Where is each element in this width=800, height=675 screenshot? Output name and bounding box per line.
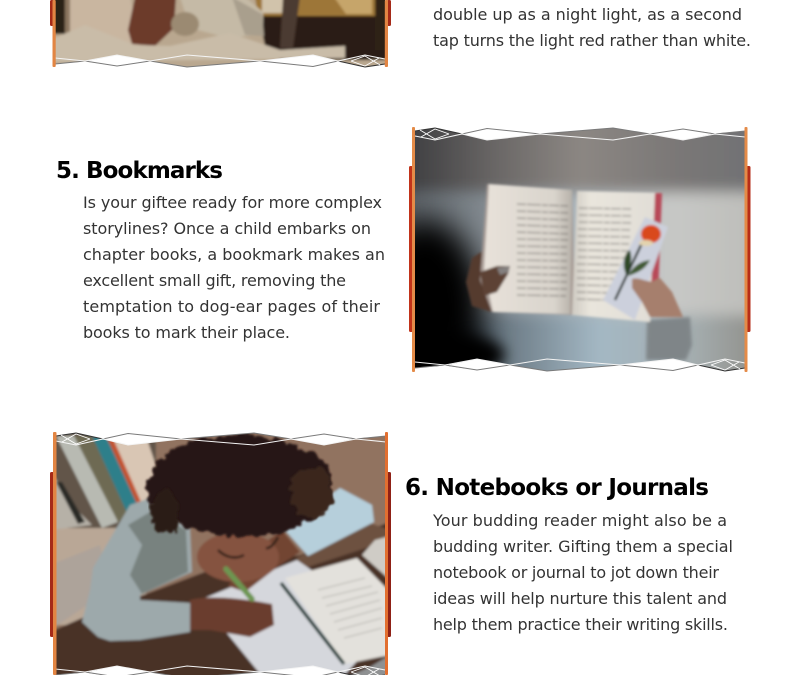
body text: bookmarks: Is your giftee ready for more complex	[83, 193, 382, 212]
body text: notebooks	[432, 511, 733, 634]
body text: bookmarks: storylines? Once a child embarks on	[83, 219, 371, 238]
body text: bookmarks: temptation to dog-ear pages of their	[83, 297, 380, 316]
photo: hands holding open book with rose bookmark	[415, 128, 744, 370]
body text: notebooks: Your budding reader might also be a	[432, 511, 727, 530]
text block: night light description (end): tap turns the light red rather than white.	[433, 31, 751, 50]
body text: notebooks: notebook or journal to jot down their	[433, 563, 719, 582]
side bars: left	[50, 432, 56, 675]
body text: bookmarks: excellent small gift, removing the	[83, 271, 346, 290]
side bars: left	[50, 0, 56, 67]
side bars: right	[385, 432, 391, 675]
side bars: right	[744, 127, 750, 372]
body text: bookmarks	[83, 193, 385, 342]
heading: 6. Notebooks or Journals: 6. Notebooks or Journals	[405, 475, 709, 501]
heading: 5. Bookmarks: 5. Bookmarks	[56, 158, 223, 184]
section 6: notebooks text	[405, 475, 733, 634]
photo card: bookmark in open book	[409, 127, 750, 372]
body text: bookmarks: chapter books, a bookmark makes an	[83, 245, 385, 264]
section 5: bookmarks text	[56, 158, 385, 342]
body text: notebooks: budding writer. Gifting them a special	[433, 537, 733, 556]
decorative lattice edge: top	[415, 125, 745, 140]
photo: child in bed	[50, 0, 390, 70]
decorative lattice edge: bottom	[55, 55, 385, 70]
decorative lattice edge: bottom	[55, 666, 385, 675]
photo: girl writing at a table	[50, 425, 390, 675]
text block: night light description (end): double up as a night light, as a second	[433, 5, 742, 24]
side bars: right	[385, 0, 391, 67]
side bars: left	[409, 127, 415, 372]
body text: notebooks: help them practice their writing skills.	[433, 615, 728, 634]
body text: notebooks: ideas will help nurture this talent and	[433, 589, 727, 608]
body text: bookmarks: books to mark their place.	[83, 323, 290, 342]
decorative lattice edge: bottom	[415, 359, 745, 374]
photo card: girl writing in notebook	[50, 425, 391, 675]
decorative lattice edge: top	[56, 430, 386, 445]
photo card: night light (cropped at top)	[50, 0, 391, 70]
text block: night light description (end)	[433, 5, 751, 50]
